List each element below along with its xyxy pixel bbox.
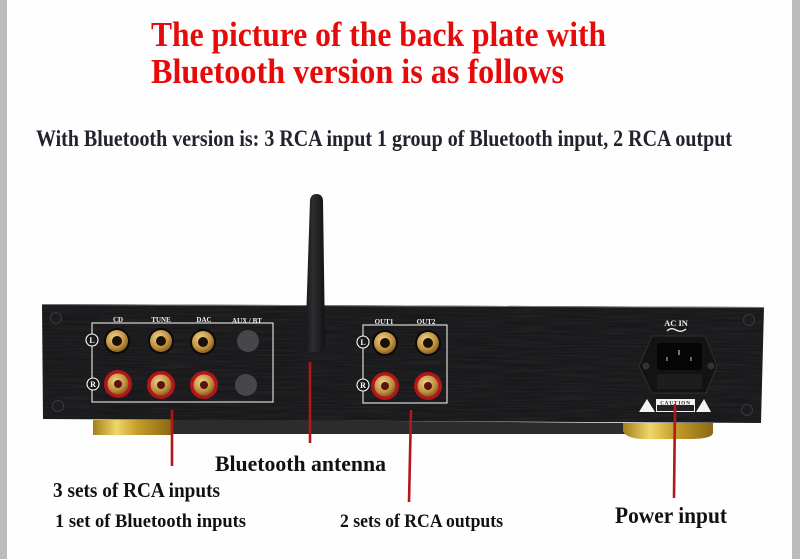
right gold foot: [623, 423, 713, 439]
caution label: [656, 399, 695, 412]
input group frame: [92, 323, 273, 402]
pointer: RCA inputs: [171, 410, 173, 466]
output group frame: [363, 325, 447, 403]
jack labels: AUX / BT: [232, 317, 262, 325]
title: Bluetooth version is as follows: [151, 52, 564, 91]
title: The picture of the back plate with: [151, 15, 606, 54]
label: Power input: Power input: [615, 503, 727, 528]
pointer: antenna: [309, 362, 311, 443]
red RCA jacks, bottom row: [104, 370, 442, 400]
AC IN label: AC IN: [664, 318, 689, 328]
left gold foot: [93, 420, 171, 435]
label: 1 set of Bluetooth inputs: 1 set of Bluetooth inputs: [55, 511, 246, 532]
label: 3 sets of RCA inputs: 3 sets of RCA inputs: [53, 478, 220, 502]
amplifier back panel photo: [42, 194, 764, 439]
IEC power socket: [639, 336, 717, 393]
jack labels: [113, 316, 436, 326]
jack labels: CD: [113, 316, 123, 324]
gold RCA jacks, top row: [104, 328, 441, 356]
left and right channel badges: [86, 334, 369, 391]
label: Bluetooth antenna: Bluetooth antenna: [215, 451, 386, 476]
jack labels: OUT1: [375, 318, 394, 326]
jack labels: TUNE: [151, 316, 171, 324]
warning triangles: [639, 399, 711, 412]
photo backdrop: [15, 178, 790, 473]
antenna: [305, 194, 325, 352]
pointer: power input: [674, 404, 675, 498]
left and right channel badges: L: [89, 336, 95, 345]
label: 2 sets of RCA outputs: 2 sets of RCA outputs: [340, 511, 503, 532]
jack labels: DAC: [196, 316, 212, 324]
jack labels: OUT2: [417, 318, 436, 326]
screws: [50, 312, 754, 416]
caution label: CAUTION: [660, 402, 691, 406]
left and right channel badges: R: [360, 381, 366, 390]
left page border: [0, 0, 7, 559]
AUX / BT blanking plugs: [235, 330, 259, 396]
mains wave symbol: [667, 329, 686, 331]
left and right channel badges: R: [90, 380, 96, 389]
title: [151, 15, 606, 91]
under-chassis shadow: [170, 419, 625, 434]
right page border: [792, 0, 800, 559]
pointer: RCA outputs: [409, 410, 411, 502]
left and right channel badges: L: [360, 338, 366, 347]
chassis plate: [42, 304, 764, 424]
